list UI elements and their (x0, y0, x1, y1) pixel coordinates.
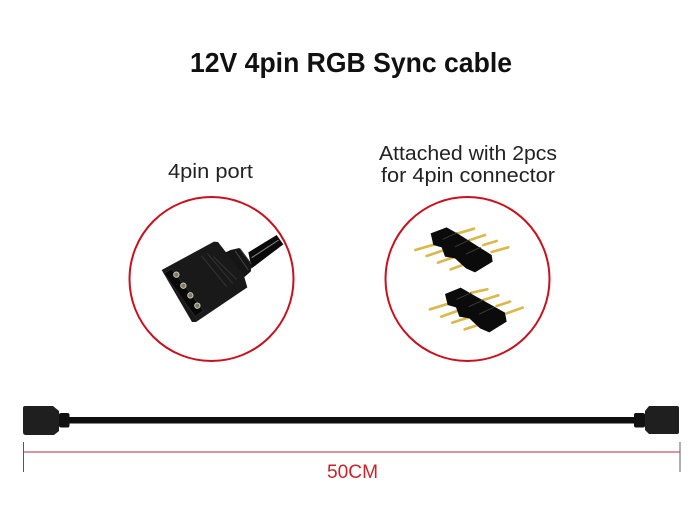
cable (23, 406, 679, 435)
dimension line (24, 442, 680, 472)
panel: 4pin port circle (130, 197, 294, 361)
right strain relief (634, 413, 645, 428)
icon: upper pin connector (415, 227, 508, 272)
title: 12V 4pin RGB Sync cable (190, 47, 512, 78)
left strain relief (59, 413, 70, 428)
label: 4pin port: 4pin port (168, 161, 253, 183)
label: attached connectors: for 4pin connector (381, 165, 555, 187)
right plug (645, 406, 679, 434)
icon: 4pin port connector (162, 235, 283, 322)
label: attached connectors: Attached with 2pcs (379, 143, 557, 165)
panel: 4pin connectors circle (386, 197, 550, 361)
cable wire (68, 417, 636, 424)
dimension label: 50CM: 50CM (327, 462, 378, 483)
left plug (23, 406, 59, 435)
label: attached connectors (379, 143, 557, 187)
icon: lower pin connector (430, 288, 523, 332)
